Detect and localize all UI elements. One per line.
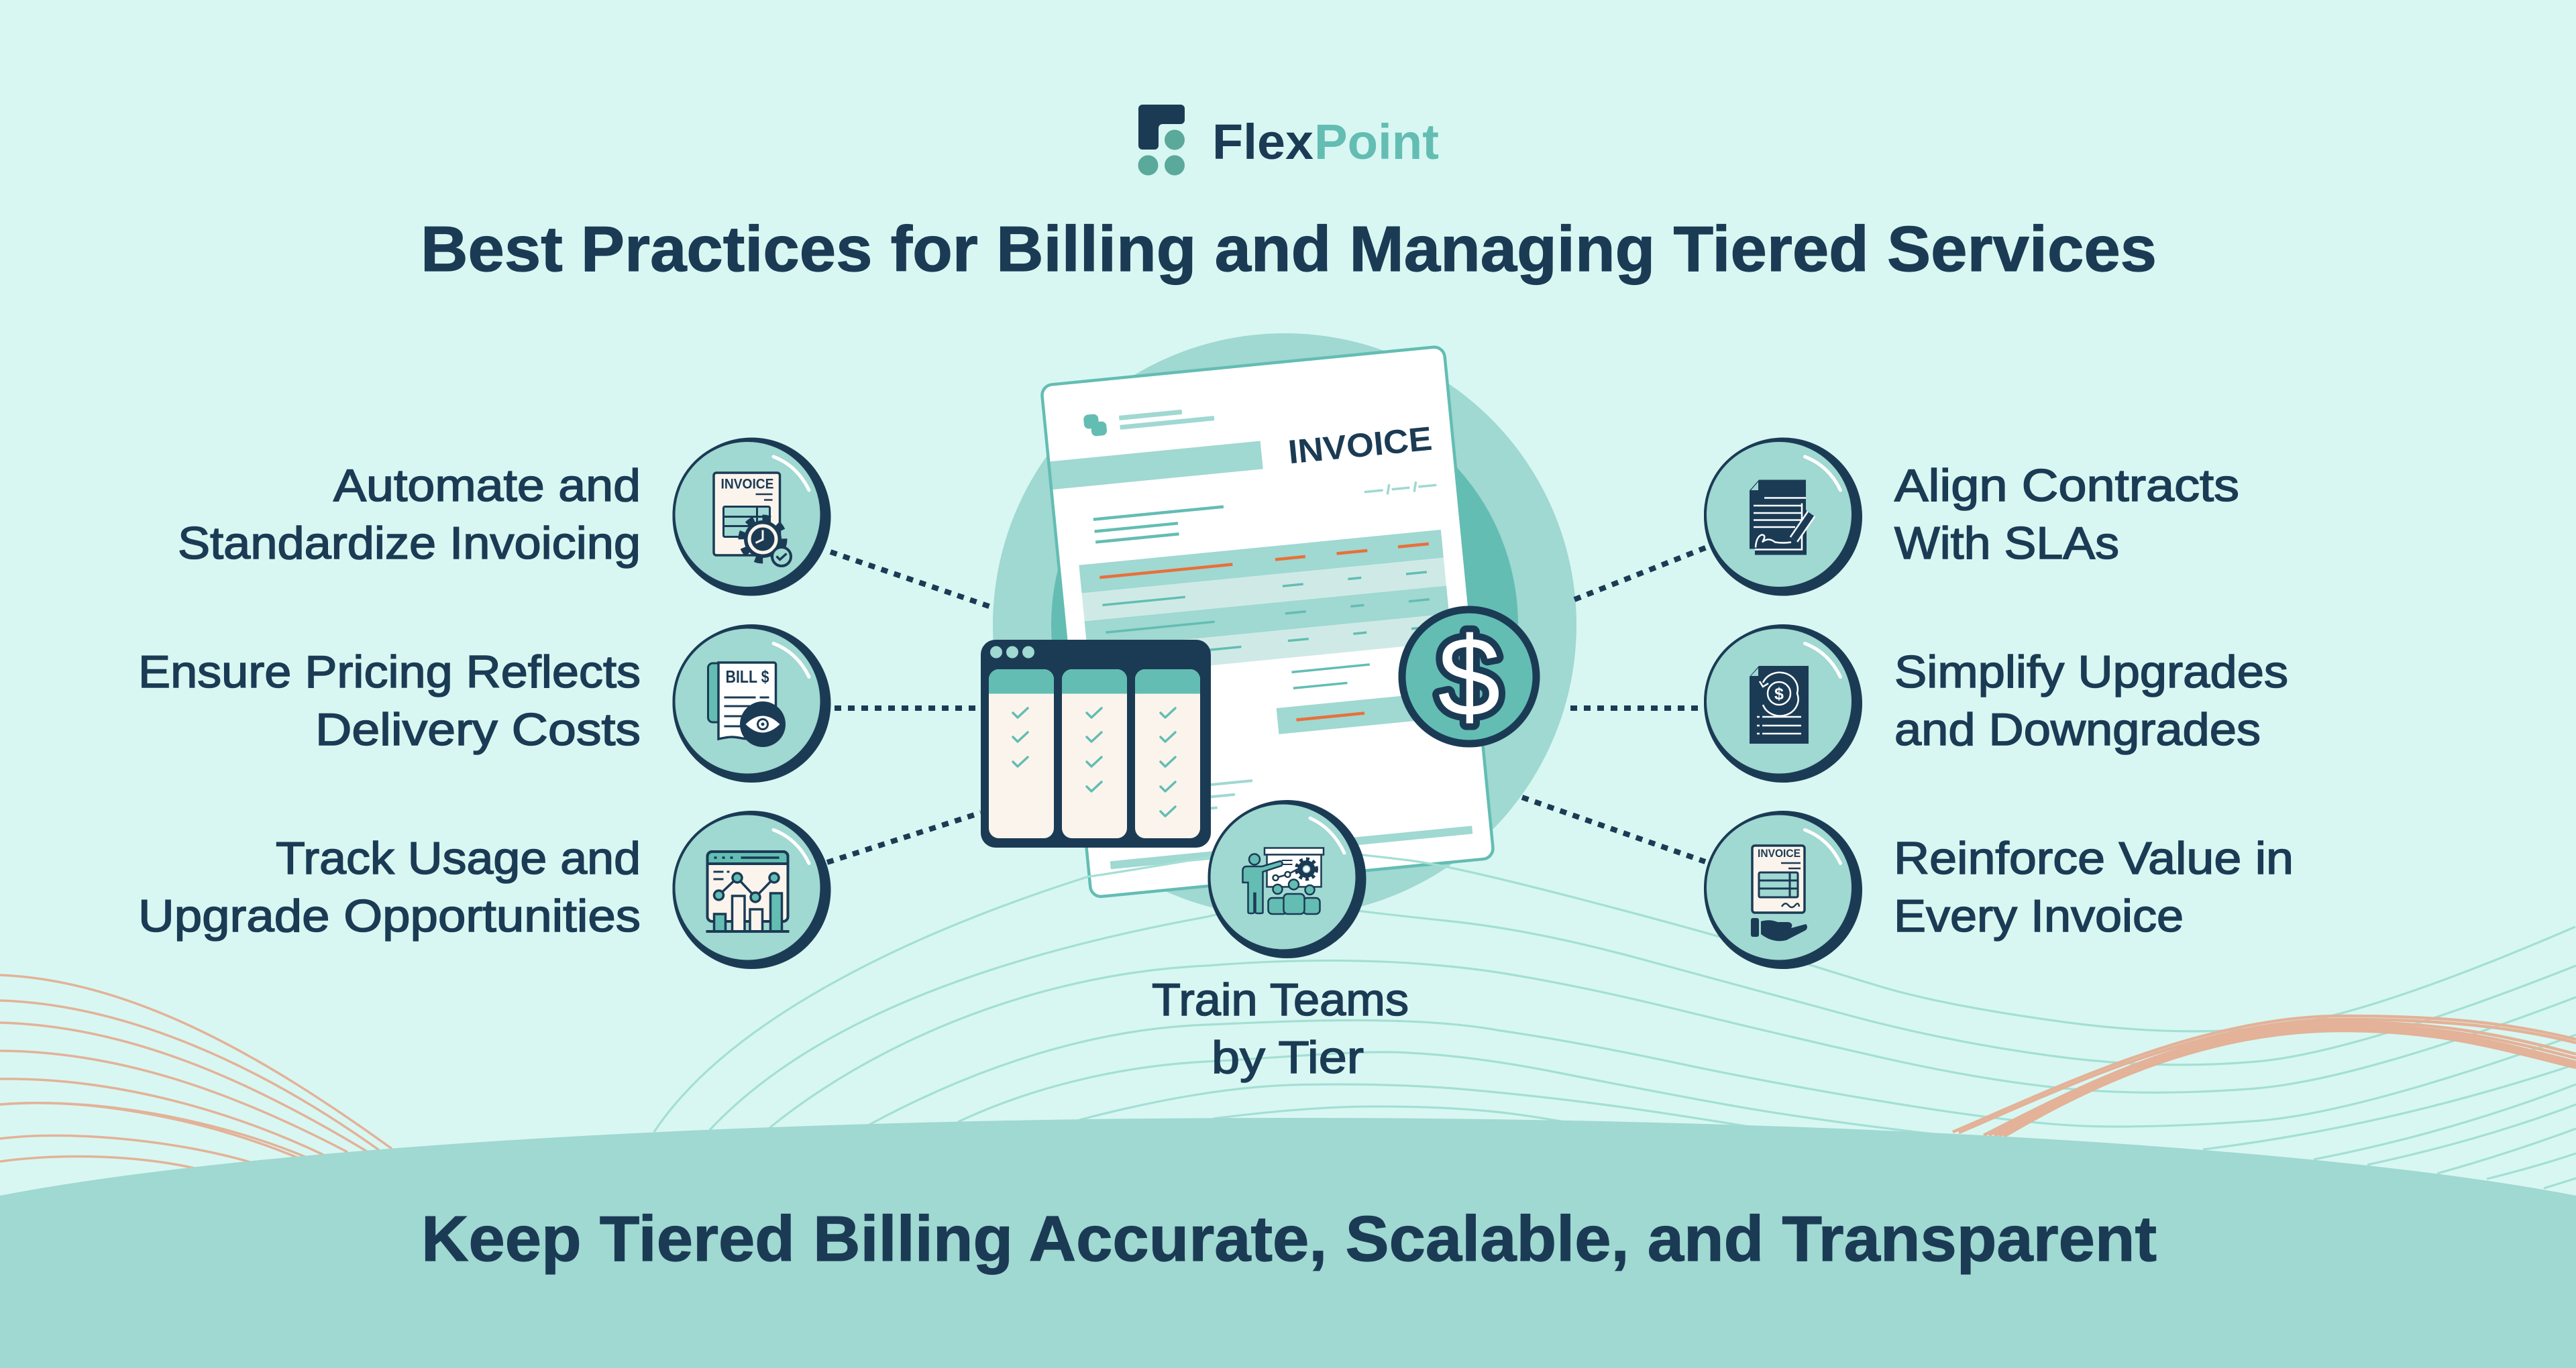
label: reinforce value in every invoice: Every Invoice xyxy=(1894,891,2184,942)
invoice mini logo xyxy=(1083,413,1108,437)
label: train teams by tier xyxy=(1152,974,1409,1083)
bubble: simplify upgrades xyxy=(1704,624,1862,783)
invoice table xyxy=(1079,530,1455,709)
icon: invoice with clock gear: INVOICE xyxy=(720,476,774,492)
orange decorative lines, right xyxy=(1953,1016,2576,1137)
orange decorative lines, left xyxy=(0,975,392,1168)
icon: invoice on hand xyxy=(1751,846,1807,941)
label: train teams by tier: Train Teams xyxy=(1152,974,1409,1025)
label: ensure pricing reflects delivery costs xyxy=(138,646,641,755)
label: ensure pricing reflects delivery costs: Delivery Costs xyxy=(315,704,641,755)
dollar coin xyxy=(1402,610,1536,744)
label: automate and standardize invoicing: Standardize Invoicing xyxy=(178,518,641,569)
icon: document with refresh dollar xyxy=(1750,666,1809,744)
label: simplify upgrades and downgrades: Simplify Upgrades xyxy=(1894,646,2288,697)
label: reinforce value in every invoice: Reinforce Value in xyxy=(1894,833,2294,884)
icon: signed contract xyxy=(1750,480,1811,555)
teal decorative wave lines xyxy=(654,850,2576,1188)
label: automate and standardize invoicing: Automate and xyxy=(333,460,641,511)
label: align contracts with SLAs xyxy=(1894,460,2239,569)
label: train teams by tier: by Tier xyxy=(1212,1032,1364,1083)
tier column 1 xyxy=(989,669,1054,838)
icon: invoice with clock gear xyxy=(714,473,791,566)
bubble: reinforce value xyxy=(1704,811,1862,969)
label: track usage and upgrade opportunities xyxy=(138,833,641,942)
footer band xyxy=(0,1118,2576,1368)
title: Best Practices for Billing and Managing Tiered Services xyxy=(421,213,2157,285)
bubble: automate invoicing xyxy=(672,437,830,595)
logo: FlexPoint: Point xyxy=(1314,114,1439,170)
invoice document xyxy=(1041,346,1494,897)
bubble: pricing reflects delivery costs xyxy=(672,624,830,783)
icon: trainer and audience xyxy=(1242,848,1324,914)
invoice heading: INVOICE xyxy=(1287,420,1434,471)
footer message: Keep Tiered Billing Accurate, Scalable, and Transparent xyxy=(421,1203,2157,1275)
label: track usage and upgrade opportunities: Upgrade Opportunities xyxy=(138,891,641,942)
label: reinforce value in every invoice xyxy=(1894,833,2294,942)
icon: bill with eye: BILL $ xyxy=(726,667,769,687)
icon: invoice on hand: INVOICE xyxy=(1758,847,1801,860)
dollar coin: $ xyxy=(1438,614,1501,740)
label: simplify upgrades and downgrades xyxy=(1894,646,2288,755)
icon: document with refresh dollar: $ xyxy=(1774,685,1784,703)
logo: FlexPoint: Flex xyxy=(1212,114,1313,170)
label: simplify upgrades and downgrades: and Downgrades xyxy=(1894,704,2261,755)
dotted connectors xyxy=(827,547,1709,862)
label: align contracts with SLAs: With SLAs xyxy=(1894,518,2119,569)
central backdrop circles xyxy=(993,333,1576,917)
invoice total band xyxy=(1277,691,1459,734)
icon: bill with eye xyxy=(708,663,786,747)
label: track usage and upgrade opportunities: Track Usage and xyxy=(276,833,641,884)
icon: usage chart window xyxy=(706,852,789,931)
tier column 2 xyxy=(1062,669,1127,838)
logo: FlexPoint xyxy=(1138,105,1439,176)
label: automate and standardize invoicing xyxy=(178,460,641,569)
label: align contracts with SLAs: Align Contracts xyxy=(1894,460,2239,511)
label: ensure pricing reflects delivery costs: Ensure Pricing Reflects xyxy=(138,646,641,697)
bubble: align contracts xyxy=(1704,437,1862,595)
bubble: train teams xyxy=(1208,800,1366,958)
tier column 3 xyxy=(1135,669,1200,838)
bubble: track usage xyxy=(672,811,830,969)
tier comparison window xyxy=(981,640,1211,848)
